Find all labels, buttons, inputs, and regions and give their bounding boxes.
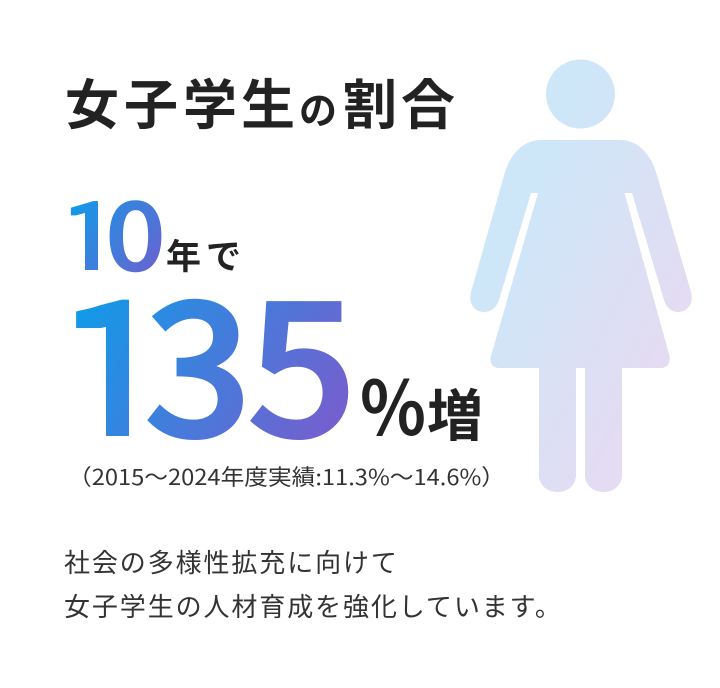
title: 学	[183, 61, 237, 140]
stat: 135 percent increase: 増	[427, 372, 483, 453]
title: 子	[124, 61, 178, 140]
stat: 135 percent increase: 1	[54, 223, 176, 489]
stat: 10 years: 年	[166, 229, 201, 280]
title: の	[299, 80, 337, 135]
stat: 10 years	[70, 200, 239, 272]
title: 女	[65, 61, 119, 140]
stat: 135 percent increase: 5	[247, 227, 357, 489]
title: 合	[401, 61, 455, 140]
description text: 女子学生の人材育成を強化しています。	[64, 587, 563, 624]
title: 生	[241, 61, 295, 140]
stat: 135 percent increase: %	[360, 348, 426, 457]
stat: 10 years: 0	[106, 164, 166, 297]
stat: 10 years: 1	[60, 162, 120, 297]
stat: 135 percent increase: 3	[144, 227, 252, 489]
stat: 10 years: で	[206, 229, 241, 280]
description text	[64, 543, 563, 624]
description text: 社会の多様性拡充に向けて	[64, 543, 399, 580]
icon: female figure	[470, 60, 692, 492]
title	[65, 61, 455, 140]
title: 割	[343, 61, 397, 140]
stat: 135 percent increase	[76, 298, 480, 441]
source note: （2015〜2024年度実績:11.3%〜14.6%）	[68, 460, 505, 492]
